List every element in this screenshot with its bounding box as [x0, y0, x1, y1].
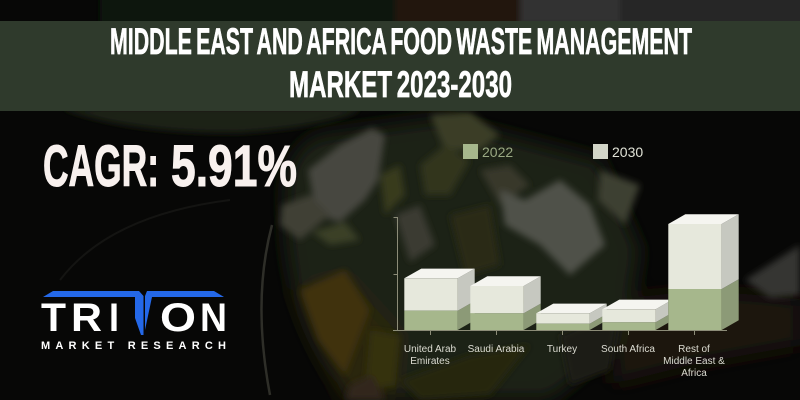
category labels: Africa: [681, 368, 707, 379]
bar chart: [393, 214, 739, 379]
title: [110, 21, 692, 105]
legend item: 2030: [593, 144, 643, 160]
legend item: 2022: 2022: [482, 144, 513, 160]
logo tagline: MARKET RESEARCH: [41, 340, 226, 352]
category labels: Emirates: [410, 356, 450, 367]
header band: [0, 21, 800, 111]
bar: Turkey: [536, 304, 607, 330]
category labels: [404, 344, 725, 379]
legend item: 2022: [463, 144, 513, 160]
CAGR callout: 5.91%: [171, 134, 297, 199]
logo mark: blue T: [43, 291, 224, 335]
legend: [463, 144, 643, 160]
category labels: Saudi Arabia: [468, 344, 525, 355]
category labels: South Africa: [601, 344, 655, 355]
logo wordmark: R: [71, 296, 102, 340]
bar: South Africa: [602, 300, 668, 330]
category labels: Rest of: [678, 344, 710, 355]
bar: Saudi Arabia: [470, 276, 541, 330]
logo: Triton Market Research: [41, 291, 227, 352]
category labels: Middle East &: [663, 356, 725, 367]
logo wordmark: I: [109, 296, 119, 340]
category labels: United Arab: [404, 344, 457, 355]
category labels: Turkey: [547, 344, 577, 355]
logo wordmark: T: [41, 296, 66, 340]
bar: Rest of Middle East & Africa: [668, 214, 739, 330]
logo wordmark: O: [160, 296, 196, 340]
chart axes: [393, 218, 727, 335]
legend item: 2030: 2030: [612, 144, 643, 160]
logo wordmark: [41, 296, 227, 340]
bar: United Arab Emirates: [404, 269, 475, 330]
logo wordmark: N: [200, 296, 227, 340]
CAGR callout: CAGR:: [43, 134, 159, 199]
title: MARKET 2023-2030: [289, 64, 512, 105]
